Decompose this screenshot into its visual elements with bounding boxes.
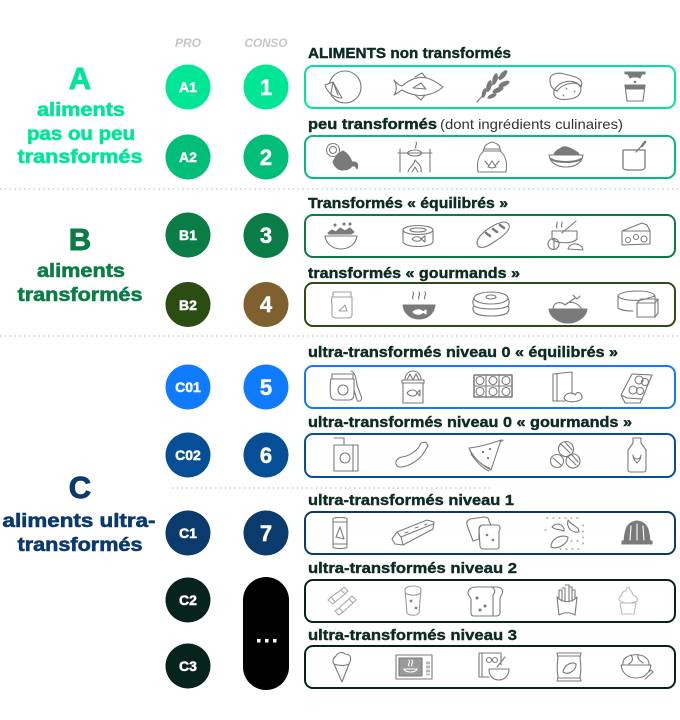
badges: B1 and 3 — [166, 212, 288, 258]
icon: oil drop and cup — [625, 72, 645, 101]
heading: ultra-transformés niveau 1 — [308, 493, 514, 509]
icon: flour sack — [478, 142, 506, 172]
badges: A2 and 2: A2 — [179, 149, 197, 165]
badges: B2 and 4 — [166, 282, 288, 327]
icon: bag of chips — [557, 653, 581, 681]
panel: row 5 ultra-transformés niveau 0 équilibrés — [305, 345, 675, 408]
category A label: A — [69, 61, 91, 96]
icon: bucket with fish — [402, 371, 424, 403]
icon: toast slices — [467, 517, 500, 549]
badge: C3 — [166, 644, 210, 688]
icon: frozen yogurt — [619, 587, 637, 614]
badges: C02 and 6: C02 — [175, 447, 201, 463]
icon: bread loaf — [477, 222, 509, 247]
panel: row 4 transformés gourmands — [305, 266, 675, 326]
badges: C01 and 5: 5 — [260, 375, 272, 400]
category C label — [2, 470, 156, 556]
icon: bowl — [549, 147, 583, 167]
icon: milk bottle — [628, 438, 646, 472]
icon: potatoes — [550, 73, 582, 100]
icon: jam jar with spoon — [330, 371, 362, 401]
icon: crepe — [469, 440, 503, 471]
icon: jar — [332, 292, 352, 318]
icon: fish — [394, 73, 443, 100]
badge: C2: C2 — [179, 592, 197, 608]
heading: ultra-transformés niveau 2 — [308, 561, 517, 577]
badges: B1 and 3: 3 — [260, 223, 272, 248]
badges: C02 and 6 — [166, 432, 288, 478]
badges: A2 and 2 — [166, 134, 288, 180]
panel: row 3 transformés équilibrés — [305, 196, 675, 257]
icon: wheat — [477, 69, 510, 102]
heading: ultra-transformés niveau 0 « équilibrés » — [308, 345, 618, 361]
frame — [305, 434, 675, 477]
column headers — [175, 36, 288, 50]
icon: citrus press — [326, 144, 358, 170]
icon: fries — [557, 585, 577, 615]
icon: cereal box — [553, 372, 582, 402]
panel: row 9 ultra-transformés niveau 3 — [305, 628, 675, 688]
badge: C3: C3 — [179, 658, 197, 674]
icon: juice carton — [334, 438, 358, 471]
category C label: aliments ultra- — [2, 511, 156, 532]
heading: ALIMENTS non transformés — [308, 46, 511, 62]
badges: A1 and 1: 1 — [260, 75, 272, 100]
panel: row 7 ultra-transformés niveau 1 — [305, 493, 675, 554]
badge: C2 — [166, 578, 210, 622]
badges: C1 and 7: 7 — [260, 521, 272, 546]
panel: row 8 ultra-transformés niveau 2 — [305, 561, 675, 622]
badges: A1 and 1: A1 — [179, 79, 197, 95]
category B label — [18, 222, 142, 306]
category C label: C — [69, 470, 91, 505]
icon: citrus — [325, 71, 361, 103]
heading: ultra-transformés niveau 3 — [308, 628, 517, 644]
badges: B1 and 3: B1 — [179, 227, 197, 243]
frame — [305, 136, 675, 178]
category C label: transformés — [18, 535, 142, 556]
heading: Transformés « équilibrés » — [308, 196, 508, 212]
frame — [305, 215, 675, 257]
icon: egg box — [621, 374, 652, 403]
badges: C02 and 6: 6 — [260, 443, 272, 468]
icon: tray of six — [474, 375, 512, 397]
icon: sliced bread — [468, 587, 503, 616]
frame — [305, 646, 675, 688]
badges: B2 and 4: 4 — [260, 292, 273, 317]
icon: fish soup bowl — [403, 292, 435, 319]
icon: fish on a spit over fire — [398, 142, 432, 172]
heading: (dont ingrédients culinaires) — [440, 116, 623, 132]
icon: ice cream cone — [333, 653, 351, 682]
badges: C1 and 7: C1 — [179, 525, 197, 541]
pill with ellipsis — [243, 577, 289, 690]
icon: tin of fish — [403, 226, 433, 246]
panel: row 1 aliments non transformés — [305, 46, 675, 108]
category A label: pas ou peu — [27, 124, 135, 145]
badges: C01 and 5 — [166, 364, 288, 410]
icon: crisps — [545, 518, 583, 549]
icon: flan — [622, 521, 652, 544]
badges: A2 and 2: 2 — [260, 145, 272, 170]
frame — [305, 66, 675, 108]
heading: transformés « gourmands » — [308, 266, 520, 282]
icon: soup and vegetables — [548, 221, 583, 250]
icon: can — [333, 518, 347, 548]
badges: C01 and 5: C01 — [175, 379, 201, 395]
category B label: B — [69, 222, 91, 257]
icon: wrap — [405, 586, 421, 615]
icon: salad bowl — [325, 223, 357, 249]
icon: cheese wheel with cube — [618, 291, 658, 317]
frame — [305, 283, 675, 326]
icon: ice cream tub — [621, 655, 653, 679]
category A label — [18, 61, 142, 168]
icon: chicken dish — [549, 295, 587, 323]
badges: C1 and 7 — [166, 510, 288, 556]
panel: row 2 peu transformés — [305, 116, 675, 178]
badges: B2 and 4: B2 — [179, 297, 197, 313]
category B label: transformés — [18, 285, 142, 306]
frame — [305, 580, 675, 622]
icon: candies — [328, 587, 356, 615]
column headers: CONSO — [244, 36, 288, 50]
icon: breaded shrimp — [396, 442, 428, 467]
frame — [305, 366, 675, 408]
panel: row 6 ultra-transformés niveau 0 gourmands — [305, 415, 675, 477]
category A label: aliments — [37, 100, 125, 121]
icon: stack of pancakes — [473, 292, 509, 316]
icon: microwave — [396, 655, 432, 679]
heading: peu transformés — [308, 117, 437, 133]
badges: A1 and 1 — [166, 64, 288, 110]
icon: nuggets — [550, 442, 580, 468]
icon: cheese — [622, 223, 650, 245]
icon: cereal box and bowl — [479, 653, 509, 680]
icon: snack bar — [392, 520, 434, 545]
column headers: PRO — [175, 36, 202, 50]
heading: ultra-transformés niveau 0 « gourmands » — [308, 415, 632, 431]
category A label: transformés — [18, 147, 142, 168]
frame — [305, 512, 675, 554]
icon: yogurt pot — [623, 142, 645, 170]
category B label: aliments — [37, 261, 125, 282]
